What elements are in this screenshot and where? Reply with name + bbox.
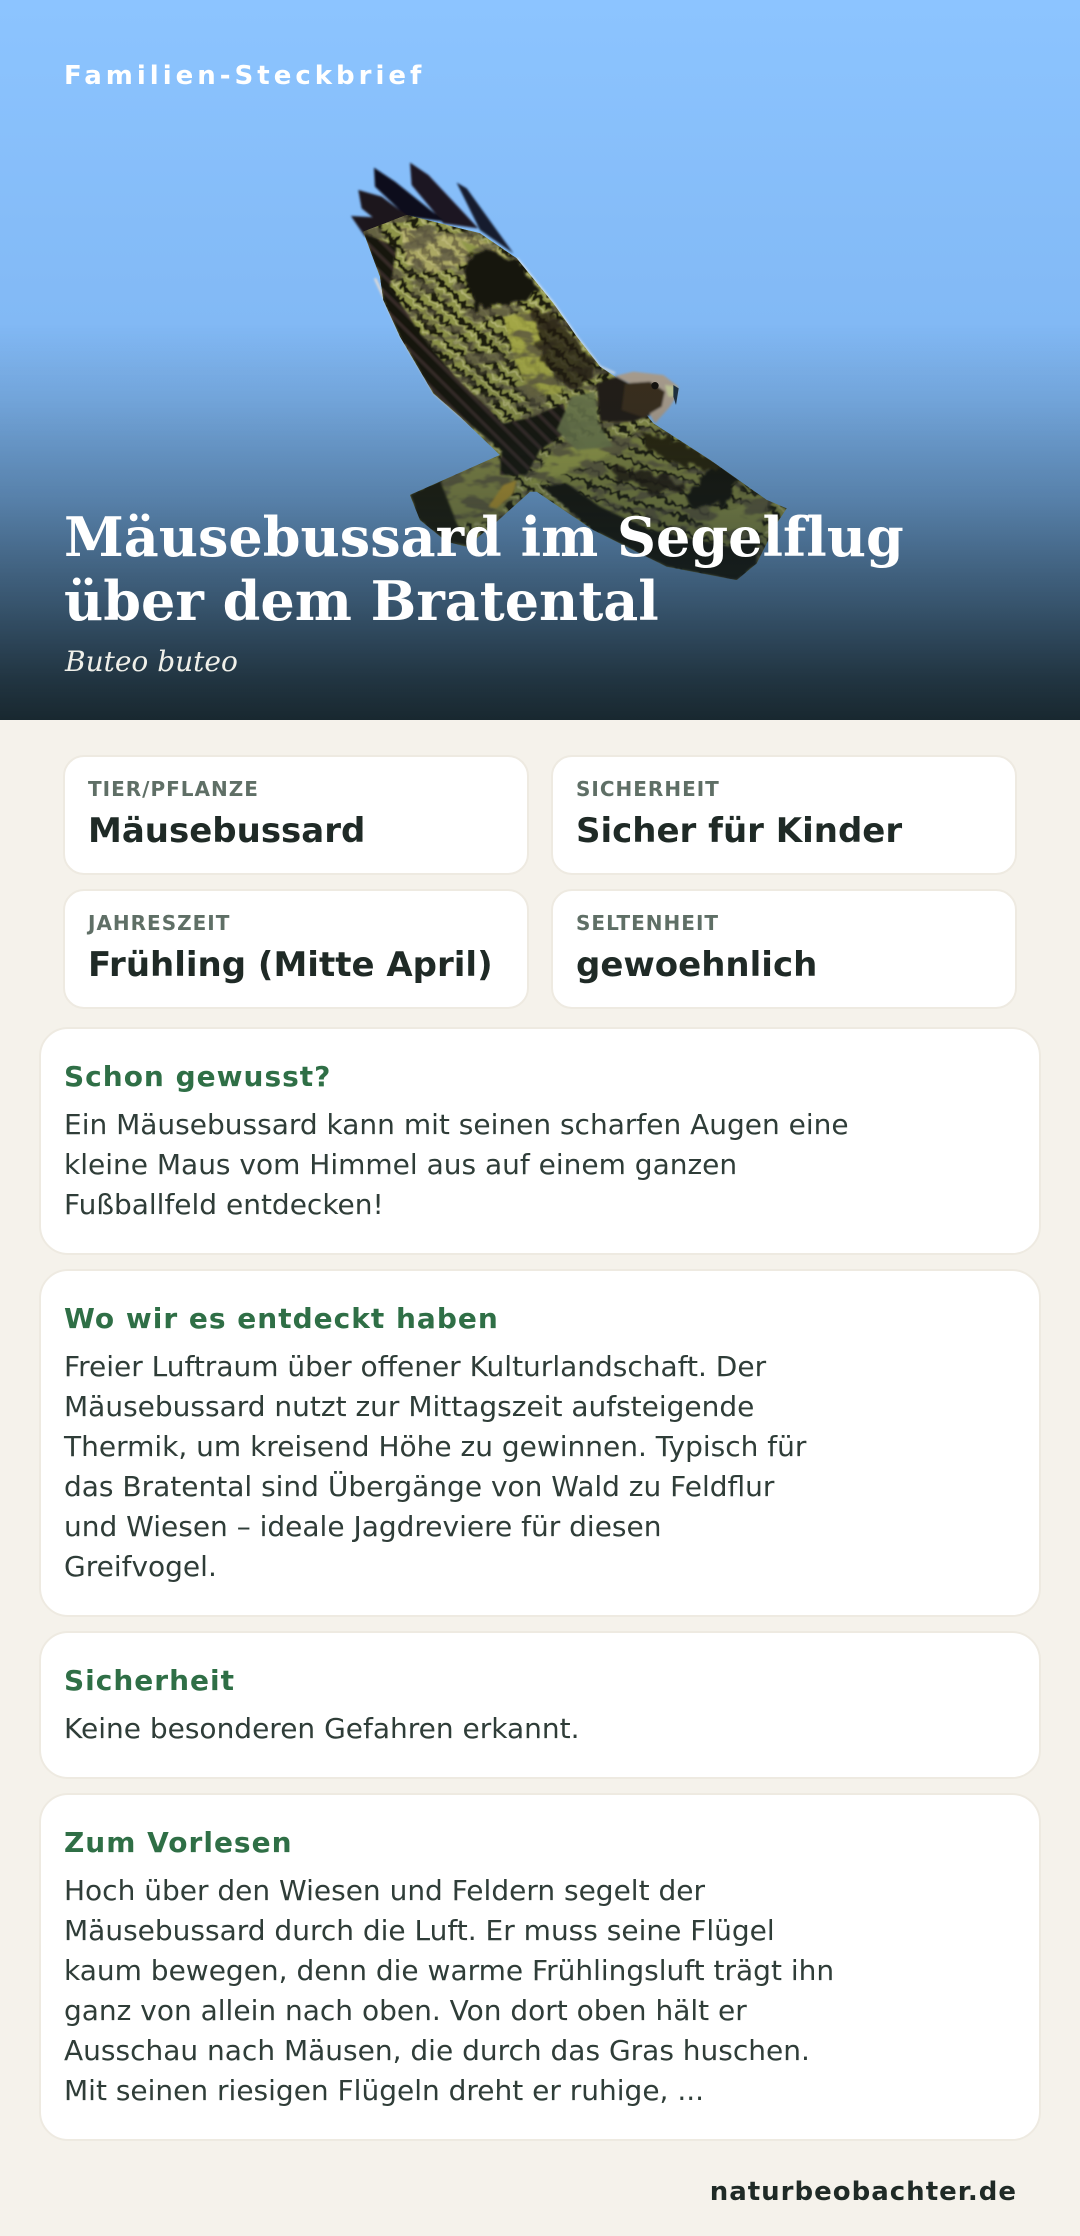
body text: ganz von allein nach oben. Von dort oben hält er bbox=[64, 1994, 747, 2027]
body text bbox=[64, 1108, 849, 1221]
panel: Schon gewusst bbox=[39, 1027, 1041, 1255]
body text: kaum bewegen, denn die warme Frühlingsluft trägt ihn bbox=[64, 1954, 834, 1987]
dark bands bbox=[363, 233, 570, 475]
title: Mäusebussard im Segelflug bbox=[64, 505, 904, 569]
body text: Fußballfeld entdecken! bbox=[64, 1188, 384, 1221]
body text bbox=[64, 1350, 806, 1583]
body text: Ein Mäusebussard kann mit seinen scharfen Augen eine bbox=[64, 1108, 849, 1141]
footer brand: naturbeobachter.de bbox=[710, 2177, 1017, 2207]
panel: Sicherheit bbox=[39, 1631, 1041, 1779]
card: Seltenheit: SELTENHEIT bbox=[576, 911, 719, 935]
card: Jahreszeit: Frühling (Mitte April) bbox=[88, 945, 493, 985]
body text: Mit seinen riesigen Flügeln dreht er ruhige, ... bbox=[64, 2074, 704, 2107]
hero photo: bird in sky bbox=[0, 0, 1080, 720]
card: Sicherheit: Sicher für Kinder bbox=[576, 811, 902, 851]
body text: Ausschau nach Mäusen, die durch das Gras huschen. bbox=[64, 2034, 810, 2067]
card: Tier/Pflanze: Mäusebussard bbox=[88, 811, 365, 851]
body and head bbox=[488, 372, 678, 508]
heading: Wo wir es entdeckt haben bbox=[64, 1302, 499, 1335]
body text: Greifvogel. bbox=[64, 1550, 217, 1583]
body text: das Bratental sind Übergänge von Wald zu Feldflur bbox=[64, 1470, 774, 1503]
card: Seltenheit bbox=[551, 889, 1017, 1009]
body text: und Wiesen – ideale Jagdreviere für diesen bbox=[64, 1510, 662, 1543]
body text: kleine Maus vom Himmel aus auf einem ganzen bbox=[64, 1148, 737, 1181]
body text: Mäusebussard durch die Luft. Er muss seine Flügel bbox=[64, 1914, 775, 1947]
card: Sicherheit bbox=[551, 755, 1017, 875]
dark patches bbox=[463, 248, 743, 507]
heading: Zum Vorlesen bbox=[64, 1826, 293, 1859]
latin name: Buteo buteo bbox=[65, 645, 238, 678]
heading: Sicherheit bbox=[64, 1664, 235, 1697]
panel: Wo wir es entdeckt haben bbox=[39, 1269, 1041, 1617]
panel: hero bbox=[0, 0, 1080, 720]
panel: Zum Vorlesen bbox=[39, 1793, 1041, 2141]
card: Jahreszeit bbox=[63, 889, 529, 1009]
title bbox=[64, 505, 904, 633]
body text: Mäusebussard nutzt zur Mittagszeit aufsteigende bbox=[64, 1390, 754, 1423]
plumage bbox=[364, 215, 786, 580]
heading: Schon gewusst? bbox=[64, 1060, 331, 1093]
body text: Freier Luftraum über offener Kulturlandschaft. Der bbox=[64, 1350, 766, 1383]
card: Tier/Pflanze: TIER/PFLANZE bbox=[88, 777, 259, 801]
card: Tier/Pflanze bbox=[63, 755, 529, 875]
body text: Keine besonderen Gefahren erkannt. bbox=[64, 1712, 580, 1745]
kicker: Familien-Steckbrief bbox=[64, 61, 425, 91]
title: über dem Bratental bbox=[64, 569, 659, 633]
pale fringe bbox=[375, 278, 503, 450]
body text bbox=[64, 1874, 834, 2107]
card: Jahreszeit: JAHRESZEIT bbox=[88, 911, 230, 935]
primaries bbox=[351, 163, 513, 253]
card: Seltenheit: gewoehnlich bbox=[576, 945, 817, 985]
body text: Hoch über den Wiesen und Feldern segelt der bbox=[64, 1874, 705, 1907]
card: Sicherheit: SICHERHEIT bbox=[576, 777, 720, 801]
body text: Thermik, um kreisend Höhe zu gewinnen. Typisch für bbox=[64, 1430, 806, 1463]
